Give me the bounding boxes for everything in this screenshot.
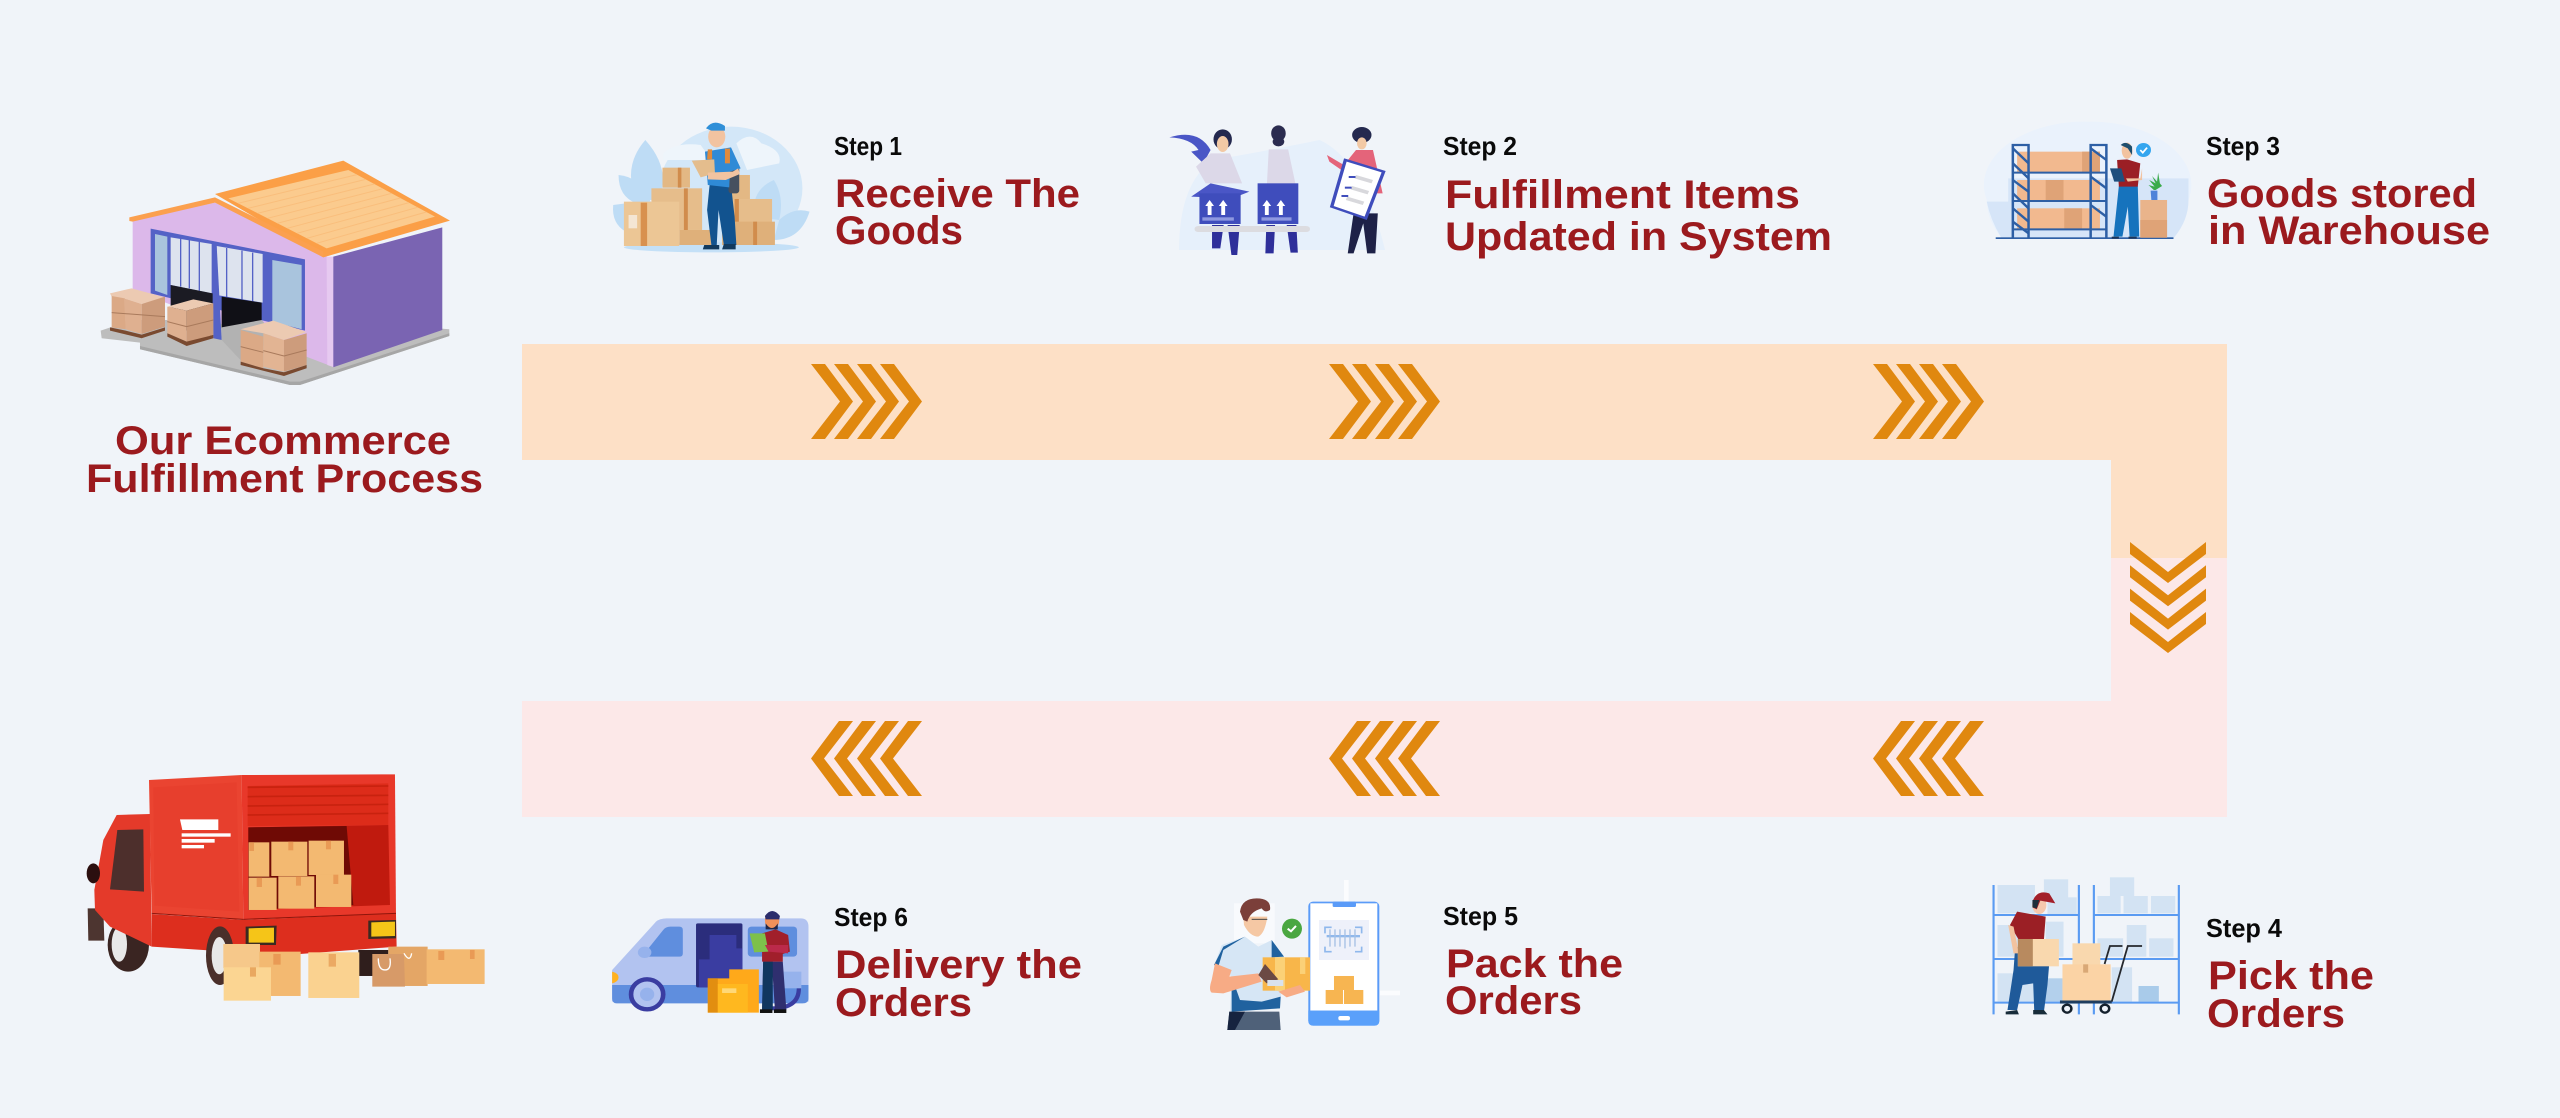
step 1 heading: Goods bbox=[835, 209, 963, 253]
step 5 heading bbox=[1445, 942, 1623, 1023]
process path: lower pink band bbox=[522, 558, 2227, 817]
icon: red truck with parcels bbox=[87, 774, 485, 1001]
icon: phone and packer scanning box bbox=[1210, 880, 1400, 1030]
title: Fulfillment Process bbox=[86, 457, 483, 501]
panel: step 6 bbox=[612, 902, 1082, 1025]
title: Our Ecommerce bbox=[115, 419, 451, 463]
step 1 heading bbox=[835, 172, 1080, 253]
step 6 heading bbox=[835, 943, 1082, 1025]
step 4 heading: Orders bbox=[2207, 992, 2345, 1036]
icon: warehouse bbox=[101, 161, 450, 385]
panel: delivery truck bbox=[87, 774, 485, 1001]
icon: delivery van and driver bbox=[612, 911, 808, 1013]
arrows: upper row chevrons bbox=[811, 364, 1984, 439]
arrows: down chevrons bbox=[2130, 542, 2206, 653]
step 5 heading: Orders bbox=[1445, 979, 1582, 1023]
step 4 label: Step 4 bbox=[2206, 913, 2283, 943]
step 4 heading: Pick the bbox=[2208, 954, 2374, 998]
step 1 heading: Receive The bbox=[835, 172, 1080, 216]
panel: step 1 bbox=[613, 123, 1080, 253]
panel: step 2 bbox=[1169, 125, 1832, 259]
step 1 label: Step 1 bbox=[834, 131, 902, 161]
icon: picker with trolley and shelves bbox=[1994, 877, 2179, 1014]
step 2 heading: Fulfillment Items bbox=[1445, 173, 1800, 217]
arrows: lower row chevrons bbox=[811, 721, 1984, 796]
title bbox=[86, 419, 483, 501]
step 5 label: Step 5 bbox=[1443, 901, 1518, 931]
step 3 heading bbox=[2207, 172, 2490, 253]
step 2 heading bbox=[1445, 173, 1832, 259]
step 3 label: Step 3 bbox=[2206, 131, 2280, 161]
panel: step 4 bbox=[1994, 877, 2374, 1036]
step 2 label: Step 2 bbox=[1443, 131, 1517, 161]
process path: upper peach band bbox=[522, 344, 2227, 558]
step 3 heading: in Warehouse bbox=[2208, 209, 2490, 253]
step 2 heading: Updated in System bbox=[1445, 215, 1832, 259]
icon: warehouse racks and worker bbox=[1984, 122, 2191, 239]
icon: courier with boxes bbox=[613, 123, 810, 252]
step 5 heading: Pack the bbox=[1446, 942, 1623, 986]
panel: warehouse and title bbox=[86, 161, 483, 501]
panel: step 5 bbox=[1210, 880, 1623, 1030]
icon: people with boxes and checklist bbox=[1169, 125, 1385, 255]
step 6 heading: Orders bbox=[835, 981, 972, 1025]
step 6 label: Step 6 bbox=[834, 902, 908, 932]
step 4 heading bbox=[2207, 954, 2374, 1036]
step 6 heading: Delivery the bbox=[835, 943, 1082, 987]
panel: step 3 bbox=[1984, 122, 2490, 253]
step 3 heading: Goods stored bbox=[2207, 172, 2477, 216]
